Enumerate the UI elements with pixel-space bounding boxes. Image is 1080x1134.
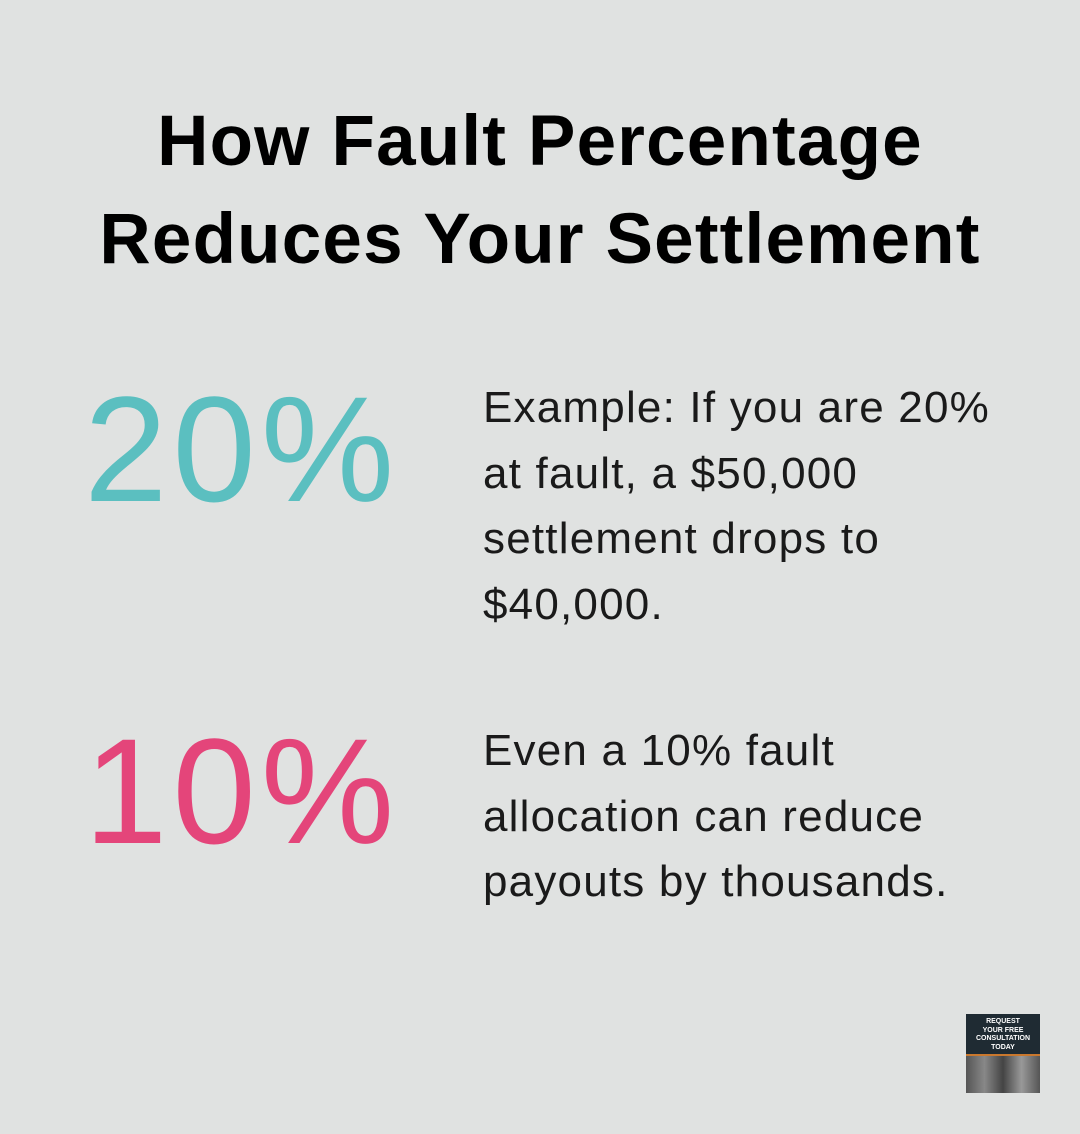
text: 20% example: at fault, a $50,000 — [483, 448, 858, 498]
text: 10% explanation — [483, 726, 949, 906]
title — [99, 102, 981, 279]
text: 10% explanation: Even a 10% fault — [483, 726, 835, 775]
title: Reduces Your Settlement — [99, 200, 981, 279]
stat: 10%: 10% — [84, 707, 399, 875]
logo: consultation badge — [966, 1014, 1040, 1093]
text: 10% explanation: payouts by thousands. — [483, 857, 949, 906]
stat: 20%: 20% — [84, 365, 399, 533]
text: 20% example: $40,000. — [483, 580, 664, 628]
text: 20% example: Example: If you are 20% — [483, 383, 990, 432]
logo: consultation badge: YOUR FREE — [983, 1026, 1023, 1034]
title: How Fault Percentage — [157, 102, 923, 181]
text: 20% example: settlement drops to — [483, 514, 880, 563]
logo: consultation badge: TODAY — [991, 1044, 1015, 1050]
text: 10% explanation: allocation can reduce — [483, 792, 924, 840]
logo: consultation badge: REQUEST — [986, 1018, 1020, 1025]
logo: consultation badge: CONSULTATION — [976, 1035, 1030, 1042]
text: 20% example — [483, 383, 990, 628]
